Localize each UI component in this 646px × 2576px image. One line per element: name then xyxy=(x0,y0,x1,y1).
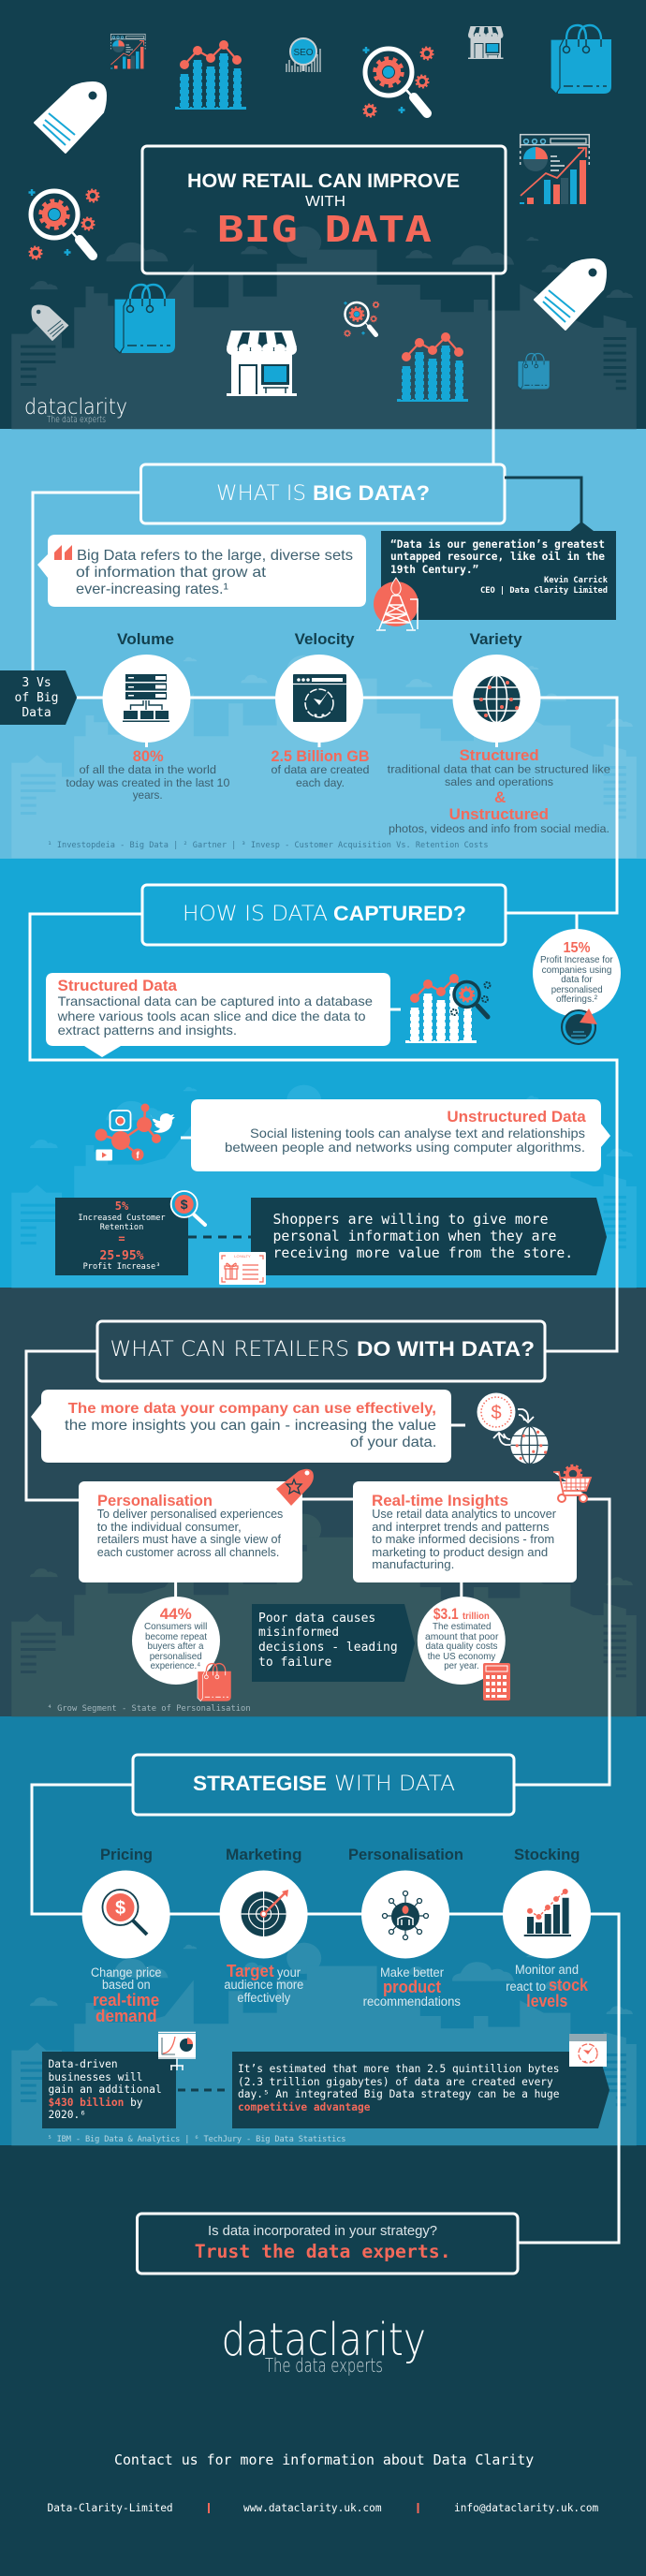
callout: data-driven businesses: $430 billion by xyxy=(49,2097,143,2109)
stat circle: $3.1 trillion: The estimated xyxy=(433,1621,492,1632)
call to action line: Trust the data experts. xyxy=(195,2241,451,2262)
callout: CEO quote: untapped resource, like oil in the xyxy=(390,551,605,563)
title line: big data: BIG DATA xyxy=(217,209,432,250)
callout: quintillion bytes chevron xyxy=(232,2052,609,2128)
callout: data-driven businesses xyxy=(42,2052,176,2128)
card: personalisation: each customer across all channels. xyxy=(97,1546,279,1559)
column: marketing: audience more xyxy=(224,1978,303,1992)
column: variety: photos, videos and info from social media. xyxy=(389,822,609,835)
card: real-time insights: manufacturing. xyxy=(372,1558,454,1571)
icon: social network: f xyxy=(136,1151,139,1161)
stat circle: 15% profit increase xyxy=(533,929,621,1044)
icon: magnifier with gears left xyxy=(28,189,99,259)
column: personalisation: Personalisation xyxy=(348,1846,463,1863)
column: volume: of all the data in the world xyxy=(79,763,216,776)
callout: CEO quote: 19th Century.” xyxy=(390,564,478,576)
badge: 3 Vs of big data: of Big xyxy=(15,691,58,705)
icon: target xyxy=(242,1890,288,1936)
icon: magnifier with gears top xyxy=(363,47,433,117)
stat box: customer retention: Retention xyxy=(100,1223,143,1232)
column: velocity xyxy=(272,630,370,789)
stat circle: 44%: buyers after a xyxy=(148,1641,204,1652)
icon: globe xyxy=(474,675,521,723)
icon: loyalty card: LOYALTY xyxy=(234,1254,251,1259)
card: real-time insights: Use retail data analytics to uncover xyxy=(372,1508,557,1521)
column: personalisation xyxy=(348,1846,463,2009)
skyline: title section xyxy=(11,227,637,429)
icon: bar chart top xyxy=(175,40,246,110)
callout: shoppers chevron xyxy=(251,1198,607,1275)
stat circle: 44%: 44% xyxy=(160,1605,192,1623)
callout: shoppers chevron: Shoppers are willing to give more xyxy=(273,1212,549,1228)
stat circle: $3.1 trillion: per year. xyxy=(444,1660,479,1671)
callout: data-driven businesses: businesses will xyxy=(49,2071,143,2083)
column: variety xyxy=(388,630,610,835)
card: personalisation: to the individual consumer, xyxy=(97,1521,242,1534)
stat box: customer retention xyxy=(55,1198,188,1275)
column: marketing: effectively xyxy=(237,1991,290,2005)
background band: how is data captured section xyxy=(0,859,646,1288)
icon: price tag left xyxy=(35,82,106,153)
icon: loyalty card xyxy=(219,1252,266,1285)
column: stocking: Monitor and xyxy=(515,1963,579,1977)
column: personalisation: recommendations xyxy=(363,1995,461,2009)
heading: strategise with data: WITH DATA xyxy=(334,1772,455,1796)
column: variety: Unstructured xyxy=(449,805,549,823)
icon: SEO magnifier: SEO xyxy=(293,48,314,58)
column: variety: traditional data that can be structured like xyxy=(388,762,610,775)
card: personalisation: To deliver personalised experiences xyxy=(97,1508,283,1521)
callout: poor data chevron: decisions - leading xyxy=(258,1641,398,1655)
icon: price magnifier xyxy=(103,1890,147,1935)
icon: shopping bag top right xyxy=(551,25,611,94)
footnote: what is big data sources: ¹ Investopdeia - Big Data | ² Gartner | ³ Invesp - Customer Acquisition Vs. Retention Costs xyxy=(47,841,489,850)
callout: poor data chevron: Poor data causes xyxy=(258,1612,375,1626)
column: velocity: of data are created xyxy=(272,763,370,776)
skyline: what can retailers do section xyxy=(11,1514,637,1716)
stat circle: 44% xyxy=(132,1597,231,1701)
stat circle: $3.1 trillion: amount that poor xyxy=(425,1631,499,1642)
stat circle: $3.1 trillion: data quality costs xyxy=(425,1641,498,1652)
icon: shopping bag lower left xyxy=(114,285,175,353)
callout: data-driven businesses: Data-driven xyxy=(49,2058,118,2070)
column: velocity: Velocity xyxy=(295,630,355,648)
column: personalisation: product xyxy=(383,1978,441,1996)
icon: dollar magnifier: $ xyxy=(181,1197,188,1212)
stat circle: $3.1 trillion: trillion xyxy=(462,1611,490,1622)
contact details row: info@dataclarity.uk.com xyxy=(454,2502,599,2514)
column: marketing xyxy=(220,1846,308,2005)
panel: what can retailers do with data xyxy=(31,1321,591,1714)
callout: unstructured data xyxy=(191,1099,610,1171)
column: volume: today was created in the last 10 xyxy=(66,776,230,789)
callout: more data: The more data your company can use effectively, xyxy=(68,1401,436,1417)
panel: strategise with data xyxy=(42,1755,609,2144)
icon: shop xyxy=(227,331,297,396)
icon: social network xyxy=(95,1103,175,1161)
skyline: strategise section xyxy=(11,1943,637,2145)
stat circle: $3.1 trillion: $3.1 xyxy=(433,1605,459,1623)
stat circle: 44%: personalised xyxy=(150,1651,202,1662)
callout: quintillion bytes chevron: day.⁵ An integrated Big Data strategy can be a huge xyxy=(238,2088,560,2100)
stat box: customer retention: Profit Increase³ xyxy=(83,1262,160,1272)
column: marketing: your xyxy=(277,1965,301,1980)
callout: poor data chevron: to failure xyxy=(258,1656,331,1670)
stat box: customer retention: = xyxy=(118,1232,125,1245)
card: personalisation: retailers must have a single view of xyxy=(97,1533,281,1546)
callout: definition speech bubble: ever-increasing rates.¹ xyxy=(76,581,228,597)
column: stocking: react to xyxy=(506,1980,546,1994)
panel: what is big data xyxy=(0,464,616,850)
panel: how is data captured xyxy=(46,885,621,1285)
heading: what can retailers do with data: DO WITH DATA? xyxy=(357,1337,535,1361)
background band: what is big data section xyxy=(0,429,646,859)
icon: price tag right xyxy=(535,259,606,330)
column: volume: years. xyxy=(133,788,163,802)
stat box: customer retention: Increased Customer xyxy=(78,1214,166,1223)
column: variety: Structured xyxy=(460,746,539,764)
heading: strategise with data: STRATEGISE xyxy=(193,1772,327,1795)
panel: call to action xyxy=(137,2214,518,2274)
logo tagline: The data experts xyxy=(47,415,106,425)
column: stocking: levels xyxy=(526,1992,567,2010)
footnote: personalisation source: ⁴ Grow Segment - State of Personalisation xyxy=(47,1704,251,1714)
heading: strategise with data xyxy=(133,1755,514,1815)
dashed connector xyxy=(178,2088,228,2092)
contact details row: Data-Clarity-Limited xyxy=(47,2502,173,2514)
callout: quintillion bytes chevron: competitive advantage xyxy=(238,2101,371,2113)
title line: with: WITH xyxy=(305,194,345,210)
stat circle: 15% profit increase: 15% xyxy=(564,940,590,956)
badge: 3 Vs of big data: Data xyxy=(22,706,51,720)
icon: SEO magnifier xyxy=(286,38,320,72)
icon: speed gauge window xyxy=(293,674,346,722)
card: real-time insights: and interpret trends and patterns xyxy=(372,1521,549,1534)
badge: 3 Vs of big data xyxy=(0,670,77,725)
flow connector line xyxy=(26,273,619,2243)
icon: pie chart xyxy=(562,1008,597,1044)
icon: coral calculator xyxy=(483,1663,510,1700)
callout: definition speech bubble: Big Data refers to the large, diverse sets xyxy=(77,548,353,564)
column: volume: Volume xyxy=(117,630,174,648)
icon: presentation board xyxy=(158,2032,196,2070)
icon: chart with magnifier xyxy=(405,974,491,1043)
callout: unstructured data: Unstructured Data xyxy=(447,1108,586,1126)
callout: data-driven businesses: gain an additional xyxy=(49,2083,162,2096)
heading: what can retailers do with data xyxy=(97,1321,545,1381)
callout: shoppers chevron: personal information when they are xyxy=(273,1229,556,1244)
column: variety: & xyxy=(494,788,506,806)
card: personalisation xyxy=(79,1469,314,1582)
stat circle: 44%: Consumers will xyxy=(144,1621,207,1632)
column: pricing: demand xyxy=(95,2007,157,2025)
heading: what can retailers do with data: WHAT CAN RETAILERS xyxy=(110,1337,349,1362)
card: real-time insights: Real-time Insights xyxy=(372,1492,508,1509)
callout: quintillion bytes chevron: (2.3 trillion gigabytes) of data are created every xyxy=(238,2076,553,2088)
column: velocity: 2.5 Billion GB xyxy=(272,747,369,765)
logo tagline: The data experts xyxy=(265,2354,383,2377)
stat circle: 44%: become repeat xyxy=(145,1631,207,1642)
skyline: what is big data section xyxy=(11,655,637,858)
column: variety: sales and operations xyxy=(445,775,553,788)
stat circle: $3.1 trillion: the US economy xyxy=(428,1651,496,1662)
callout: shoppers chevron: receiving more value from the store. xyxy=(273,1245,573,1261)
stat box: customer retention: 25-95% xyxy=(100,1249,144,1263)
card: personalisation: Personalisation xyxy=(97,1492,213,1509)
callout: quintillion bytes chevron: It’s estimated that more than 2.5 quintillion bytes xyxy=(238,2063,560,2075)
call to action frame xyxy=(137,2214,518,2274)
callout: CEO quote: Kevin Carrick xyxy=(544,575,609,585)
column: pricing: Pricing xyxy=(100,1846,153,1863)
icon: white gauge window xyxy=(569,2034,607,2067)
heading: how is data captured: CAPTURED? xyxy=(333,902,466,925)
dashed connector xyxy=(188,1236,251,1238)
column: velocity: each day. xyxy=(296,776,345,789)
callout: structured data xyxy=(46,973,390,1057)
logo wordmark: dataclarity xyxy=(24,395,127,420)
stat circle: 15% profit increase: data for xyxy=(561,974,593,985)
callout: more data xyxy=(31,1390,451,1463)
card: real-time insights: marketing to product design and xyxy=(372,1546,548,1559)
icon group: retail icons around title xyxy=(28,25,611,402)
title line: how retail can improve: HOW RETAIL CAN IMPROVE xyxy=(187,170,460,192)
callout: poor data chevron: misinformed xyxy=(258,1626,339,1640)
icon: servers xyxy=(123,674,169,722)
column: personalisation: Make better xyxy=(380,1965,444,1980)
callout: structured data: where various tools acan slice and dice the data to xyxy=(57,1008,366,1023)
heading: how is data captured xyxy=(142,885,506,945)
callout: more data: of your data. xyxy=(350,1435,436,1450)
heading: what is big data: BIG DATA? xyxy=(313,481,430,505)
column: marketing: Marketing xyxy=(226,1846,301,1863)
column: pricing: Change price xyxy=(91,1965,161,1980)
icon: small analytics chart xyxy=(110,34,145,69)
callout: more data: the more insights you can gain - increasing the value xyxy=(65,1418,436,1434)
column: pricing: real-time xyxy=(93,1991,159,2009)
icon: analytics chart right xyxy=(520,135,589,204)
callout: unstructured data: between people and networks using computer algorithms. xyxy=(225,1140,585,1155)
column: volume xyxy=(66,630,230,802)
icon: dollar magnifier xyxy=(171,1191,205,1225)
card: real-time insights: to make informed decisions - from xyxy=(372,1533,554,1546)
callout: definition speech bubble xyxy=(37,535,366,607)
stat circle: 15% profit increase: Profit Increase for xyxy=(540,954,613,965)
quote connector xyxy=(505,478,581,524)
callout: poor data chevron xyxy=(252,1604,415,1682)
icon: money and globe exchange xyxy=(477,1393,548,1465)
callout: structured data: extract patterns and insights. xyxy=(58,1023,237,1038)
card: real-time insights xyxy=(353,1465,591,1582)
icon: person network xyxy=(382,1892,429,1940)
icon: money and globe exchange: $ xyxy=(491,1403,502,1423)
call to action question: Is data incorporated in your strategy? xyxy=(208,2223,437,2239)
column: stocking xyxy=(503,1846,591,2010)
icon: small grey shop xyxy=(468,26,504,59)
callout: CEO quote: CEO | Data Clarity Limited xyxy=(480,585,608,596)
stat circle: 15% profit increase: offerings.² xyxy=(556,994,597,1005)
heading: how is data captured: HOW IS DATA xyxy=(183,902,328,926)
icon: coral cart with gear xyxy=(553,1465,591,1502)
logo: dataclarity top xyxy=(24,395,127,425)
icon: coral shopping bag xyxy=(198,1664,231,1701)
callout: unstructured data: Social listening tools can analyse text and relationships xyxy=(250,1126,585,1141)
contact heading: Contact us for more information about Data Clarity xyxy=(114,2451,534,2468)
stat circle: 15% profit increase: companies using xyxy=(542,964,612,976)
icon: price magnifier: $ xyxy=(115,1898,125,1919)
background band: strategise section xyxy=(0,1716,646,2145)
callout: structured data: Structured Data xyxy=(58,977,178,994)
stat circle: 15% profit increase: personalised xyxy=(551,984,603,995)
background band: title section xyxy=(0,0,646,429)
stat circle: $3.1 trillion xyxy=(418,1597,510,1700)
icon: small shopping bag xyxy=(518,354,550,389)
icon: oil derrick xyxy=(374,578,418,630)
icon: small grey price tag xyxy=(32,305,68,341)
stat box: customer retention: 5% xyxy=(115,1200,129,1213)
stat circle: 44%: experience.⁴ xyxy=(151,1660,200,1671)
logo: dataclarity large xyxy=(221,2314,426,2377)
icon: small magnifier with gears xyxy=(344,302,379,336)
heading: what is big data xyxy=(140,464,505,523)
title frame xyxy=(142,146,506,273)
column: marketing: Target xyxy=(227,1962,274,1980)
column: pricing xyxy=(82,1846,170,2025)
badge: 3 Vs of big data: 3 Vs xyxy=(22,676,51,690)
footnote: strategise sources: ⁵ IBM - Big Data & Analytics | ⁶ TechJury - Big Data Statistics xyxy=(47,2135,346,2144)
contact details row: www.dataclarity.uk.com xyxy=(243,2502,382,2514)
column: stocking: Stocking xyxy=(514,1846,580,1863)
icon: coral tag xyxy=(276,1469,314,1506)
column: pricing: based on xyxy=(102,1978,151,1992)
column: variety: Variety xyxy=(470,630,522,648)
icon: growth bars xyxy=(524,1889,571,1936)
background band: footer section xyxy=(0,2145,646,2576)
column: volume: 80% xyxy=(133,747,164,765)
skyline: how is data captured section xyxy=(11,1085,637,1288)
logo wordmark: dataclarity xyxy=(221,2314,426,2366)
callout: structured data: Transactional data can be captured into a database xyxy=(58,994,373,1008)
contact details row xyxy=(47,2502,599,2514)
background band: what can retailers do section xyxy=(0,1288,646,1716)
callout: definition speech bubble: of information that grow at xyxy=(76,565,267,581)
callout: CEO quote: “Data is our generation’s greatest xyxy=(390,538,605,551)
panel: title xyxy=(142,146,506,273)
heading: what is big data: WHAT IS xyxy=(216,481,306,506)
callout: CEO quote xyxy=(381,522,616,620)
callout: data-driven businesses: 2020.⁶ xyxy=(49,2109,86,2121)
column: stocking: stock xyxy=(549,1976,589,1995)
icon: bar chart lower xyxy=(397,332,468,402)
